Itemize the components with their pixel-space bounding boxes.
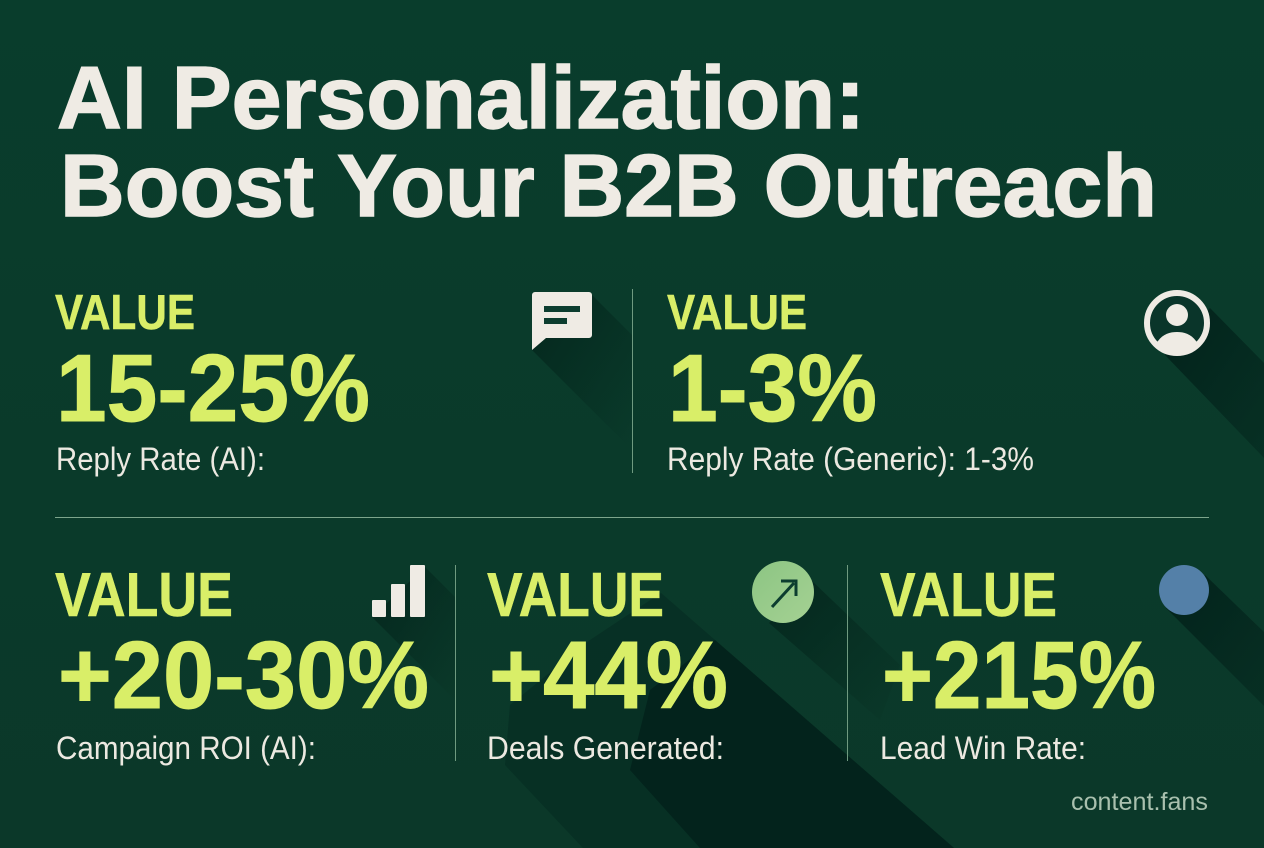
icon: person [1147,293,1207,353]
metric label: Reply Rate (Generic): 1-3% [667,441,1034,477]
big number: +20-30% [58,622,429,729]
icon: up arrow [752,561,814,623]
metric label: Deals Generated: [487,730,724,766]
title: AI Personalization: [57,48,865,147]
source credit: content.fans [1071,788,1208,816]
value label: VALUE [55,286,195,340]
big number: +215% [882,622,1156,729]
icon: blue dot [1159,565,1209,615]
value label: VALUE [667,286,807,340]
title [57,48,1157,235]
divider [455,565,456,761]
panel: campaign ROI [55,561,429,766]
panel: deals generated [487,561,814,766]
value label: VALUE [880,561,1057,630]
big number: 1-3% [668,335,877,442]
icon: bar chart [372,565,425,617]
big number: +44% [489,622,728,729]
metric label: Reply Rate (AI): [56,441,265,477]
title: Boost Your B2B Outreach [60,136,1157,235]
panel: reply rate AI [55,286,592,477]
big number: 15-25% [56,335,370,442]
icon: chat bubble [532,292,592,350]
panel: lead win rate [880,561,1209,766]
horizontal divider [55,517,1209,518]
panel: reply rate generic [667,286,1207,477]
value label: VALUE [487,561,664,630]
long shadows [372,295,1264,848]
divider [632,289,633,473]
metric label: Campaign ROI (AI): [56,730,316,766]
value label: VALUE [55,561,233,630]
metric label: Lead Win Rate: [880,730,1086,766]
divider [847,565,848,761]
